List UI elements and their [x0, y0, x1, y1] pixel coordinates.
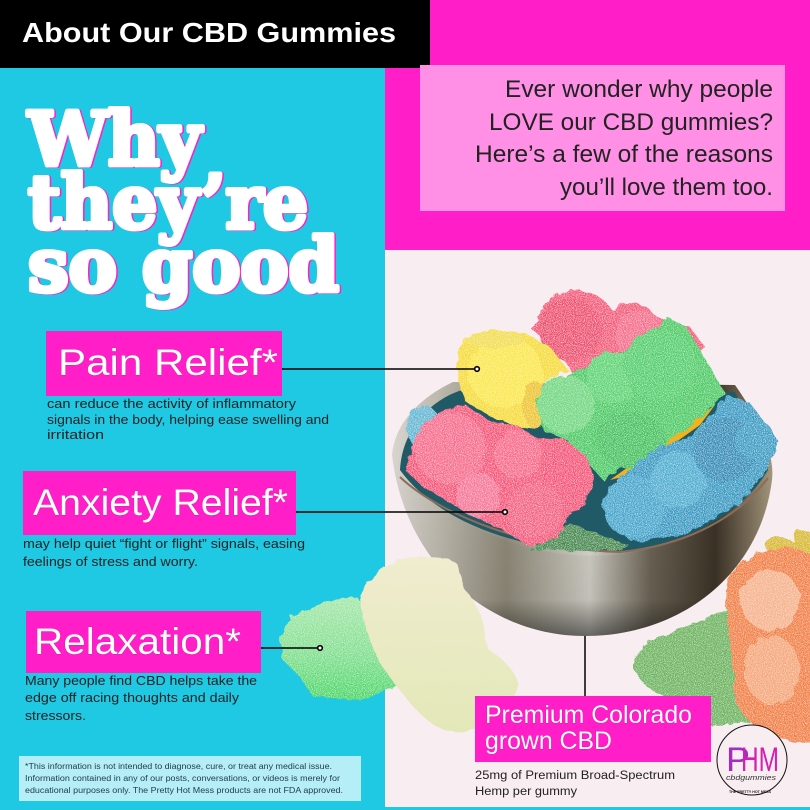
- bowl interior: [400, 390, 768, 551]
- loose gummies: yellow, green and orange: [633, 530, 810, 742]
- loose gummy: green: [280, 597, 405, 700]
- disclaimer: Information contained in any of our posts, conversations, or videos is merely for: [25, 774, 340, 783]
- panel: pain relief: [46, 331, 329, 442]
- title: [27, 97, 340, 310]
- disclaimer: *This information is not intended to diagnose, cure, or treat any medical issue.: [25, 762, 332, 771]
- intro callout: Here’s a few of the reasons: [475, 141, 773, 168]
- small blue gummy: [407, 406, 441, 450]
- illustration: bowl of gummies: [392, 290, 780, 636]
- intro callout: LOVE our CBD gummies?: [489, 109, 773, 136]
- panel: premium CBD: Hemp per gummy: [475, 786, 577, 798]
- title: Why: [29, 98, 204, 184]
- intro callout: [420, 65, 785, 211]
- yellow gummy: [457, 330, 568, 430]
- title: so good: [30, 224, 340, 310]
- title: Why: [27, 97, 203, 183]
- panel: relaxation: stressors.: [25, 709, 86, 723]
- bowl body: [392, 382, 772, 636]
- connector: relaxation: [261, 646, 322, 650]
- logo: [717, 725, 787, 795]
- pink gummy back: [532, 290, 705, 385]
- panel: anxiety relief: may help quiet “fight or flight” signals, easing: [23, 537, 305, 551]
- title: they’re: [28, 160, 308, 246]
- title: so good: [28, 223, 339, 309]
- panel: premium CBD: grown CBD: [485, 727, 612, 755]
- panel: pain relief: Pain Relief*: [58, 342, 278, 383]
- title: they’re: [30, 160, 310, 246]
- header bar: About Our CBD Gummies: [22, 17, 396, 48]
- panel: relaxation: Many people find CBD helps take the: [25, 674, 257, 688]
- panel: pain relief: can reduce the activity of inflammatory: [47, 397, 297, 411]
- disclaimer: [19, 756, 361, 801]
- panel: relaxation: [25, 611, 261, 723]
- intro callout: Ever wonder why people: [505, 76, 773, 103]
- connector: pain relief: [282, 367, 479, 371]
- logo: P: [726, 741, 750, 779]
- panel: anxiety relief: Anxiety Relief*: [33, 482, 288, 523]
- connector: premium CBD: [584, 636, 586, 696]
- dark green gummy: [530, 523, 630, 552]
- panel: anxiety relief: feelings of stress and worry.: [23, 555, 198, 569]
- panel: relaxation: Relaxation*: [34, 621, 241, 662]
- logo: THE PRETTY HOT MESS: [729, 790, 772, 794]
- blue gummy: [602, 395, 780, 543]
- intro callout: you’ll love them too.: [560, 174, 773, 201]
- pink gummy front: [405, 406, 595, 547]
- green gummy: [535, 317, 725, 480]
- logo: cbdgummies: [726, 775, 777, 782]
- logo: HM: [741, 741, 779, 779]
- connector: anxiety relief: [296, 510, 507, 514]
- panel: pain relief: irritation: [47, 428, 104, 442]
- header bar: [0, 0, 430, 68]
- panel: premium CBD: [475, 696, 711, 798]
- panel: pain relief: signals in the body, helping ease swelling and: [47, 413, 329, 427]
- panel: premium CBD: Premium Colorado: [485, 701, 692, 729]
- panel: anxiety relief: [23, 471, 305, 569]
- disclaimer: educational purposes only. The Pretty Hot Mess products are not FDA approved.: [25, 786, 343, 795]
- orange sliver: [610, 405, 715, 480]
- loose gummy: pale: [360, 557, 517, 732]
- panel: premium CBD: 25mg of Premium Broad-Spectrum: [475, 770, 675, 782]
- panel: relaxation: edge off racing thoughts and daily: [25, 691, 240, 705]
